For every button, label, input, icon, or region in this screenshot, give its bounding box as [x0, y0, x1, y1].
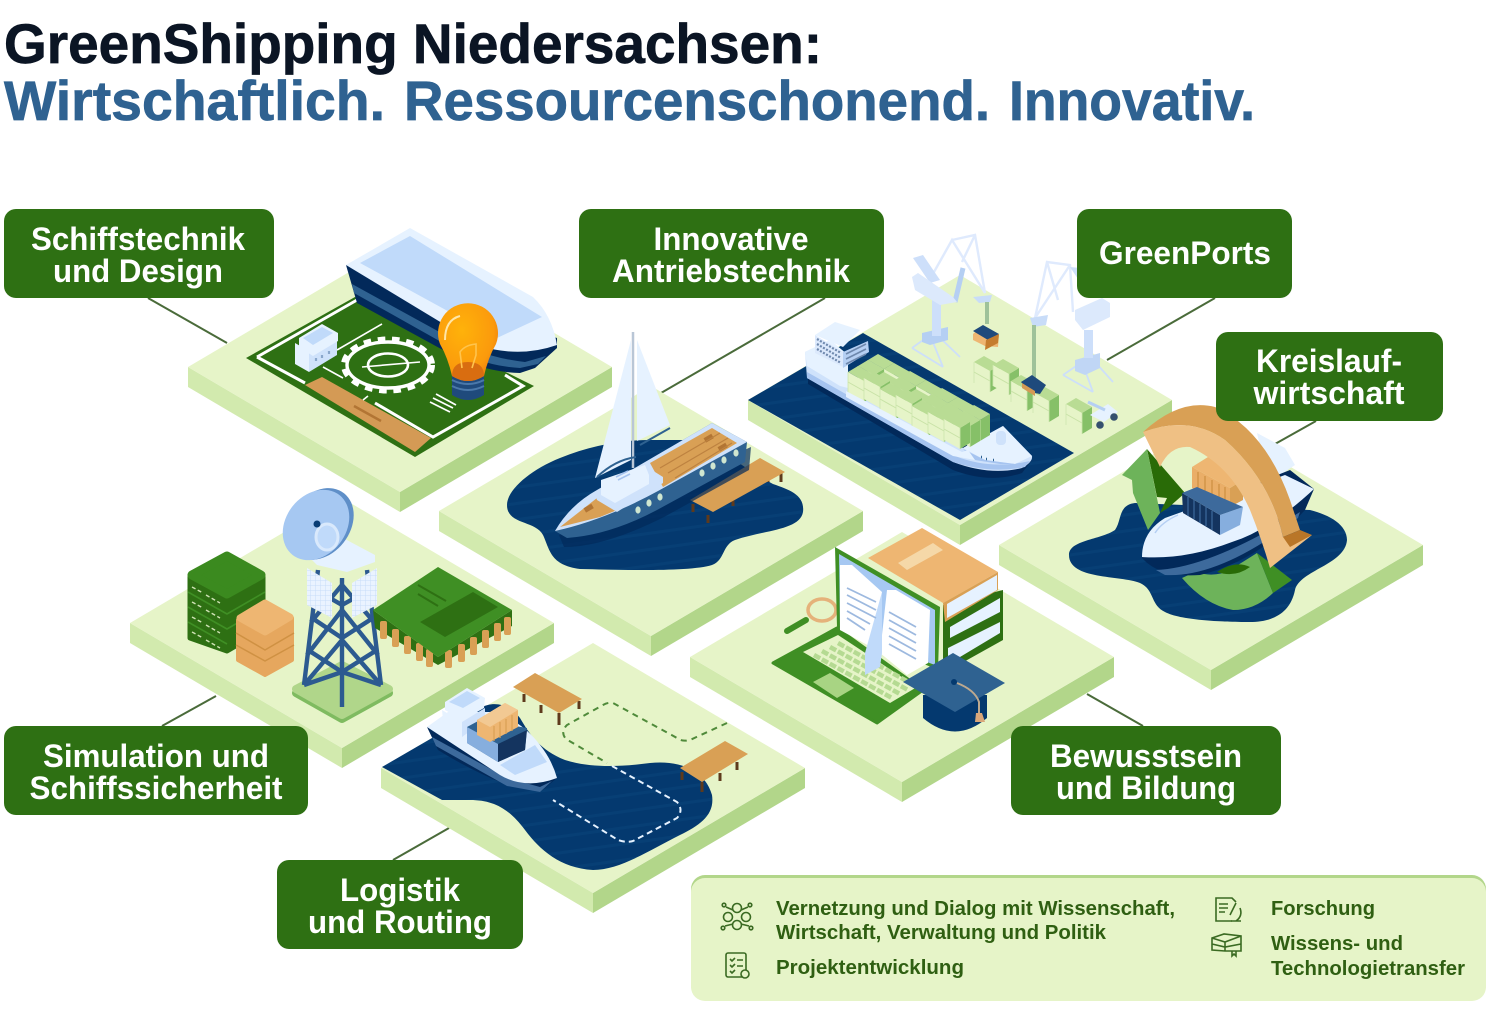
- waterway: [382, 704, 712, 870]
- label: Bewusstsein und Bildung: [1011, 726, 1281, 815]
- cargo containers: [467, 703, 527, 762]
- legend text: Wissens- und Technologietransfer: Wissens- und: [1271, 932, 1403, 955]
- board outline: [257, 300, 523, 437]
- legend text: Vernetzung: Vernetzung und Dialog mit Wissenschaft,: [776, 897, 1175, 920]
- label: Simulation und Schiffssicherheit: Simulation und: [43, 738, 269, 774]
- cabin: [595, 465, 663, 512]
- containers: [1182, 457, 1243, 535]
- title: Innovativ.: [1009, 69, 1255, 132]
- light bulb: [438, 303, 498, 400]
- quay water: [748, 333, 1074, 520]
- portholes: [635, 449, 739, 514]
- label: Logistik und Routing: Logistik: [340, 872, 460, 908]
- cargo ship: [427, 688, 557, 792]
- label: Schiffstechnik und Design: und Design: [53, 253, 223, 289]
- title: Ressourcenschonend.: [404, 69, 990, 132]
- panel: GreenPorts: [748, 235, 1172, 545]
- orange recycling arrow: [1143, 405, 1312, 568]
- platform: [188, 242, 612, 512]
- label: Schiffstechnik und Design: Schiffstechnik: [31, 221, 245, 257]
- label: Schiffstechnik und Design: [4, 209, 274, 298]
- label: Logistik und Routing: und Routing: [308, 904, 492, 940]
- container stack: [848, 354, 990, 449]
- boat decks: [560, 428, 737, 527]
- laptop base: [773, 628, 923, 723]
- label: Kreislaufwirtschaft: [1216, 332, 1443, 421]
- crane right: [1030, 262, 1113, 392]
- label: Innovative Antriebstechnik: Innovative: [654, 221, 808, 257]
- label: Kreislaufwirtschaft: wirtschaft: [1253, 375, 1405, 411]
- icon: knowledge transfer box: [1212, 934, 1241, 956]
- legend text: Wissens- und Technologietransfer: [1271, 932, 1465, 980]
- label: Innovative Antriebstechnik: [579, 209, 884, 298]
- sailing boat hull: [555, 423, 751, 547]
- legend text: Forschung: Forschung: [1271, 897, 1375, 920]
- sails: [595, 332, 670, 478]
- label: Simulation und Schiffssicherheit: Schiffssicherheit: [30, 770, 283, 806]
- panel: Schiffstechnik und Design: [188, 228, 612, 512]
- label: Innovative Antriebstechnik: Antriebstechnik: [612, 253, 850, 289]
- leader lines: [148, 298, 1316, 860]
- dashed sea route: [553, 766, 680, 842]
- title: Wirtschaftlich.: [4, 69, 385, 132]
- green recycling arrow: [1122, 449, 1292, 610]
- gear drawing: [323, 324, 456, 412]
- panel: Kreislaufwirtschaft: [999, 405, 1423, 690]
- terminal tractor: [1088, 402, 1118, 429]
- ship rail in front of containers: [846, 391, 975, 460]
- label: Kreislaufwirtschaft: Kreislauf-: [1256, 343, 1402, 379]
- label: Bewusstsein und Bildung: und Bildung: [1056, 770, 1236, 806]
- pond: [1069, 503, 1347, 622]
- icon: checklist: [726, 953, 749, 978]
- platform: [439, 386, 863, 656]
- magnifying glass: [787, 599, 836, 631]
- dock east: [680, 741, 748, 792]
- platform: [999, 420, 1423, 690]
- small building: [295, 324, 338, 372]
- legend text: Vernetzung: Wirtschaft, Verwaltung und Politik: [776, 921, 1107, 944]
- ship bridge: [815, 322, 869, 368]
- panel: Bewusstsein und Bildung: [690, 528, 1114, 802]
- label: Logistik und Routing: [277, 860, 523, 949]
- tower base: [296, 665, 389, 719]
- panel: Logistik und Routing: [381, 643, 805, 913]
- legend text: Wissens- und Technologietransfer: Technologietransfer: [1271, 957, 1465, 980]
- label: Simulation und Schiffssicherheit: [4, 726, 308, 815]
- platform: [748, 275, 1172, 545]
- green design board: [246, 297, 534, 457]
- label: GreenPorts: GreenPorts: [1099, 235, 1271, 271]
- icon: research microscope: [1216, 898, 1241, 921]
- legend text: Projektentwicklung: Projektentwicklung: [776, 956, 964, 979]
- orange server stack: [236, 603, 294, 675]
- wooden jetty: [690, 458, 785, 523]
- legend panel: [691, 875, 1486, 1001]
- platform: [381, 643, 805, 913]
- platform: [130, 498, 554, 768]
- platform top: [310, 538, 375, 572]
- lattice tower: [304, 570, 381, 707]
- crane left: [912, 235, 992, 367]
- wooden strip: [305, 377, 431, 452]
- book stack: [868, 528, 1003, 664]
- legend text: Vernetzung: [776, 897, 1175, 944]
- laptop screen with open book: [835, 547, 940, 675]
- label: GreenPorts: [1077, 209, 1292, 298]
- recycling ship: [1142, 433, 1314, 575]
- dock north: [513, 673, 582, 725]
- icon: network of people: [721, 903, 753, 930]
- green containers on quay: [974, 356, 1092, 434]
- platform: [690, 532, 1114, 802]
- green server stack: [188, 556, 265, 651]
- cargo ship: [805, 340, 1032, 478]
- satellite dish: [269, 475, 368, 573]
- second hanging container: [1021, 375, 1046, 396]
- ship hull top view: [346, 228, 557, 373]
- radar panels: [307, 568, 377, 618]
- label: Bewusstsein und Bildung: Bewusstsein: [1050, 738, 1242, 774]
- pond: [507, 440, 803, 570]
- title: GreenShipping Niedersachsen:: [4, 12, 822, 75]
- hanging orange container: [973, 325, 999, 350]
- dashed land route: [563, 703, 727, 763]
- graduation cap: [903, 653, 1005, 732]
- processor chip: [373, 567, 512, 668]
- panel: Innovative Antriebstechnik: [439, 332, 863, 656]
- panel: Simulation und Schiffssicherheit: [130, 475, 554, 768]
- title: [4, 12, 1255, 132]
